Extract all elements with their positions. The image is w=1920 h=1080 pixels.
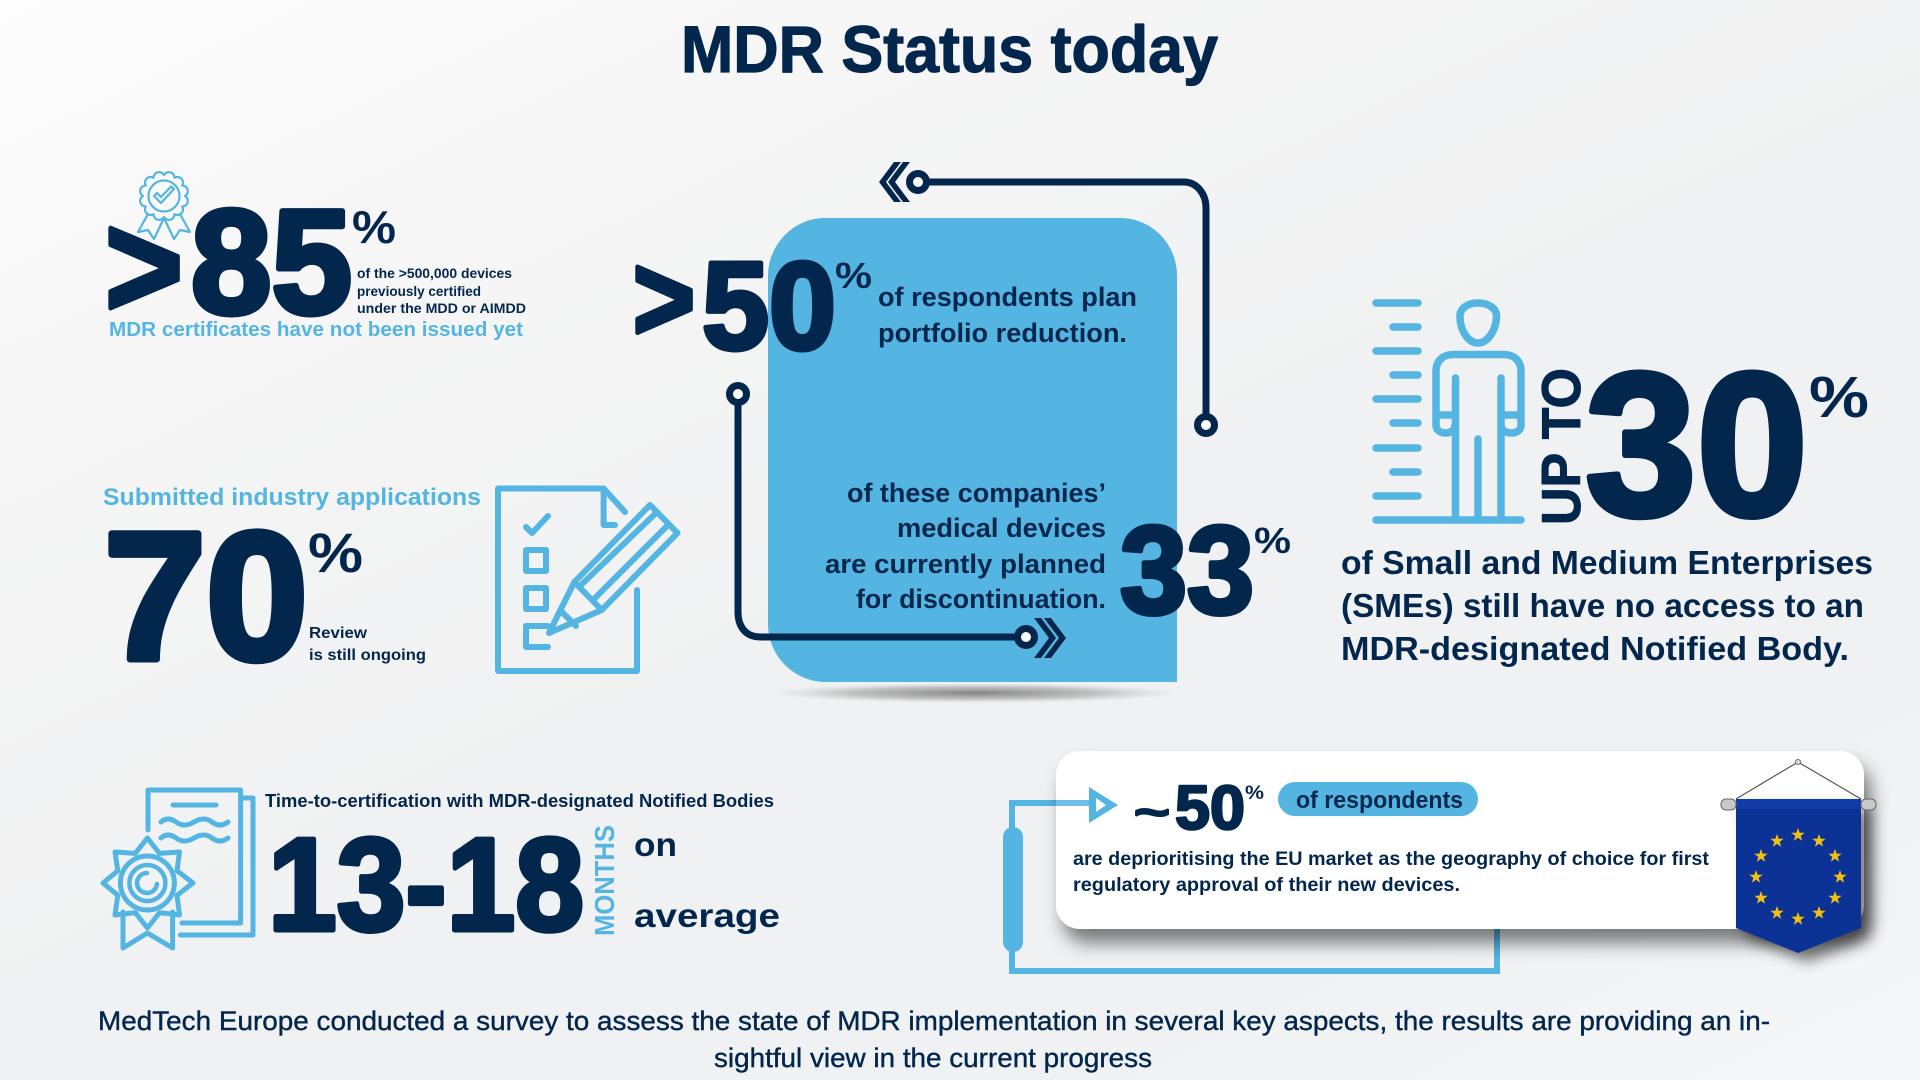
badge: of respondents	[1278, 782, 1478, 816]
caption: certificates: MDR certificates have not been issued yet	[109, 319, 523, 341]
text: on average: on	[634, 826, 677, 863]
big number 85: >	[105, 184, 183, 349]
big number 13-18: 13-18	[268, 811, 584, 958]
big number 30: 30	[1585, 331, 1808, 559]
card shadow	[770, 683, 1180, 703]
note: devices: previously certified	[357, 284, 481, 299]
big number 70: %	[308, 521, 363, 584]
big number 50: 50	[1175, 774, 1245, 843]
text: portfolio reduction: portfolio reduction.	[878, 318, 1127, 348]
text: on average	[634, 826, 780, 934]
panel: SMEs	[1341, 303, 1873, 667]
text: discontinuation: medical devices	[897, 513, 1106, 543]
text: deprioritising	[1073, 849, 1710, 896]
white card	[1056, 751, 1864, 929]
text: SMEs: (SMEs) still have no access to an	[1341, 587, 1864, 624]
icon: person with height ruler	[1376, 303, 1521, 520]
big number 33: %	[1254, 520, 1291, 561]
big number 85: 85	[191, 180, 352, 345]
text: deprioritising: regulatory approval of their new devices.	[1073, 875, 1460, 896]
icon: certificate	[103, 790, 253, 948]
connector frame	[1012, 803, 1497, 971]
text: SMEs: of Small and Medium Enterprises	[1341, 544, 1873, 581]
panel: EU market card	[1003, 751, 1876, 971]
big number 50: ~	[1134, 788, 1170, 837]
big number 85: %	[352, 201, 396, 253]
note: devices	[357, 266, 526, 316]
heading: time to certification: Time-to-certification with MDR-designated Notified Bodies	[265, 791, 774, 811]
label: up to: UP TO	[1530, 368, 1592, 525]
big number 50: %	[835, 255, 872, 296]
footer text: sightful view in the current progress	[714, 1043, 1152, 1073]
footer text	[98, 1006, 1770, 1073]
title: MDR Status today	[681, 12, 1218, 86]
big number 70: 70	[104, 494, 308, 698]
text: discontinuation	[825, 478, 1106, 614]
text: portfolio reduction	[878, 282, 1137, 348]
note: review	[309, 625, 426, 664]
big number 30: %	[1809, 365, 1869, 430]
text: discontinuation: of these companies’	[847, 478, 1106, 508]
text: SMEs: MDR-designated Notified Body.	[1341, 630, 1849, 667]
badge: of respondents: of respondents	[1296, 787, 1463, 814]
text: discontinuation: are currently planned	[825, 549, 1106, 579]
heading: submitted: Submitted industry applications	[103, 484, 481, 511]
text: discontinuation: for discontinuation.	[856, 584, 1106, 614]
big number 50: 50	[702, 238, 836, 376]
connector: top right	[879, 162, 1214, 434]
text: on average: average	[634, 897, 780, 934]
icon: award rosette	[138, 172, 190, 239]
big number 85	[105, 180, 396, 349]
connector: bottom left	[730, 386, 1066, 658]
text: deprioritising: are deprioritising the EU market as the geography of choice for first	[1073, 849, 1710, 870]
connector pill	[1003, 827, 1023, 952]
note: devices: of the >500,000 devices	[357, 266, 512, 281]
note: review: is still ongoing	[309, 647, 426, 664]
big number 50: %	[1245, 783, 1264, 804]
panel: time to certification	[103, 790, 780, 958]
icon: checklist and pencil	[498, 488, 678, 671]
big number 50: >	[633, 230, 695, 366]
note: review: Review	[309, 625, 368, 642]
icon: EU flag pennant	[1721, 760, 1876, 953]
text: portfolio reduction: of respondents plan	[878, 282, 1137, 312]
big number 50	[633, 230, 872, 376]
label: months: MONTHS	[589, 825, 620, 936]
big number 33: 33	[1120, 502, 1254, 640]
panel: certificates not issued	[105, 172, 526, 349]
big number 50	[1134, 774, 1264, 843]
panel: submitted applications	[103, 484, 678, 698]
panel: blue portfolio card	[633, 162, 1291, 703]
footer text: MedTech Europe conducted a survey to assess the state of MDR implementation in several key aspects, the results are providing an in-	[98, 1006, 1770, 1036]
connector arrow	[1089, 787, 1118, 823]
blue card	[768, 218, 1177, 682]
note: devices: under the MDD or AIMDD	[357, 301, 526, 316]
text: SMEs	[1341, 544, 1873, 667]
